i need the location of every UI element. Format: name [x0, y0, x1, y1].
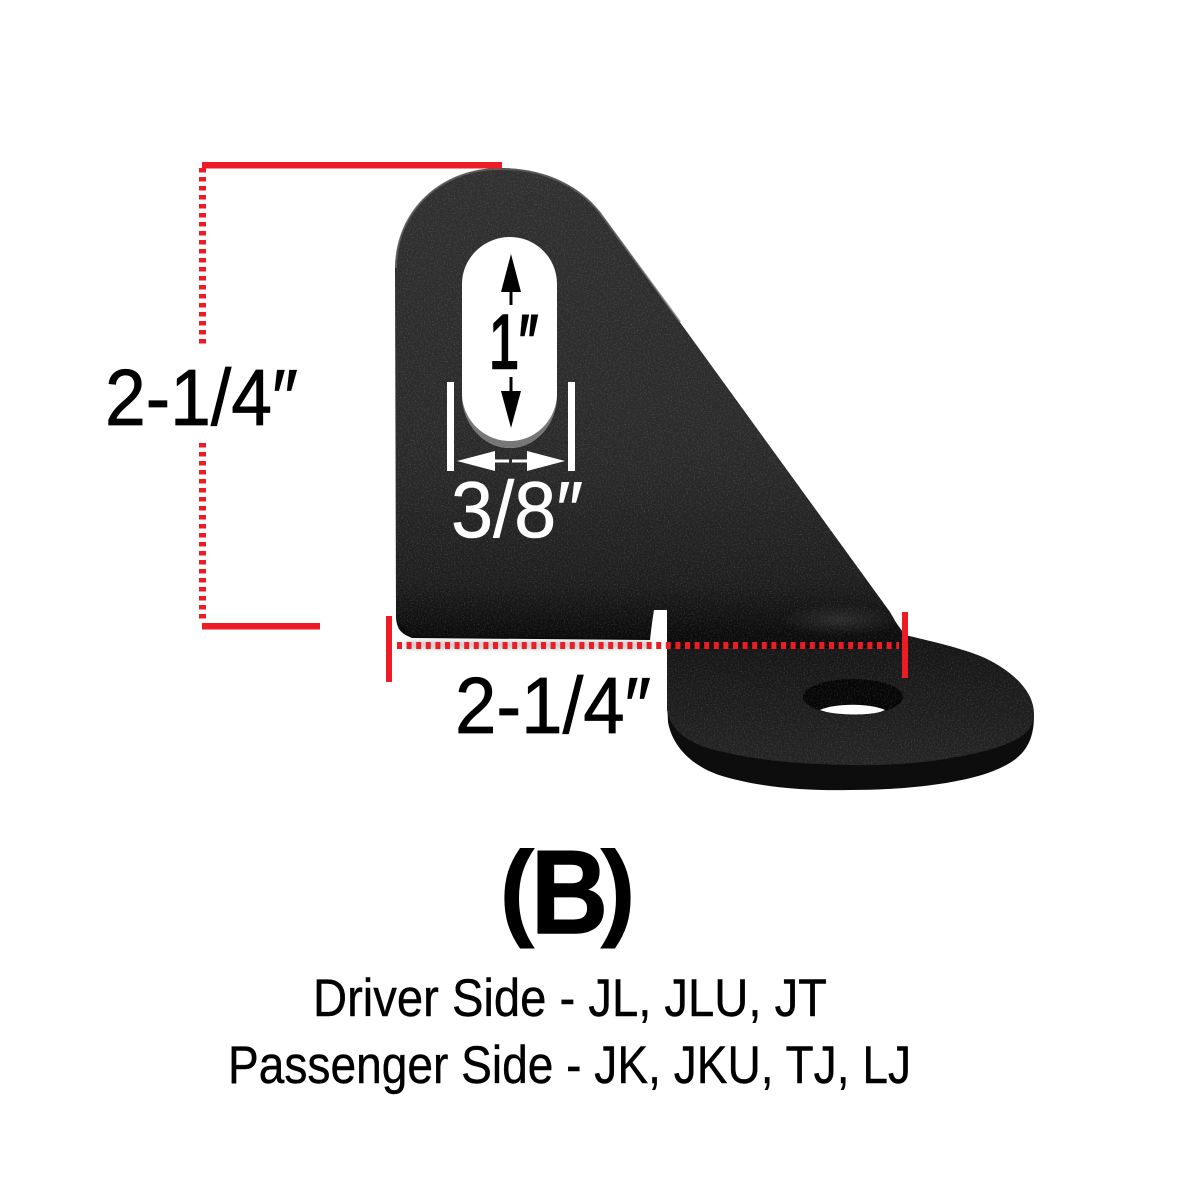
part letter heading: B	[531, 826, 608, 959]
top edge highlight	[396, 169, 680, 322]
bracket upright plate with slot	[395, 168, 902, 648]
width dimension: 2-1/4 inch red bracket	[386, 612, 908, 682]
slot length dimension: black arrows	[501, 254, 521, 428]
slot length label: 1″	[489, 300, 538, 385]
slot width label: 3/8″	[451, 465, 583, 554]
bracket tab top face	[667, 600, 1034, 765]
height label: 2-1/4″	[105, 353, 298, 442]
powder-coat texture	[395, 168, 1034, 765]
soft shadow under plate	[405, 642, 650, 648]
part letter heading	[499, 826, 636, 959]
slot lower bevel	[462, 395, 557, 448]
bracket tab edge thickness	[667, 700, 1034, 790]
fitment: driver side: Driver Side - JL, JLU, JT	[313, 969, 827, 1028]
fitment: passenger side: Passenger Side - JK, JKU, TJ, LJ	[228, 1036, 911, 1095]
width label: 2-1/4″	[455, 661, 651, 750]
mounting hole	[803, 679, 903, 715]
bend highlight	[780, 604, 900, 636]
product photo: black L-shaped bracket	[395, 168, 1034, 790]
part letter heading: (	[499, 828, 535, 949]
part letter heading: )	[600, 828, 636, 949]
height dimension: 2-1/4 inch red bracket	[202, 162, 502, 630]
slot width dimension: white arrows	[447, 382, 575, 471]
